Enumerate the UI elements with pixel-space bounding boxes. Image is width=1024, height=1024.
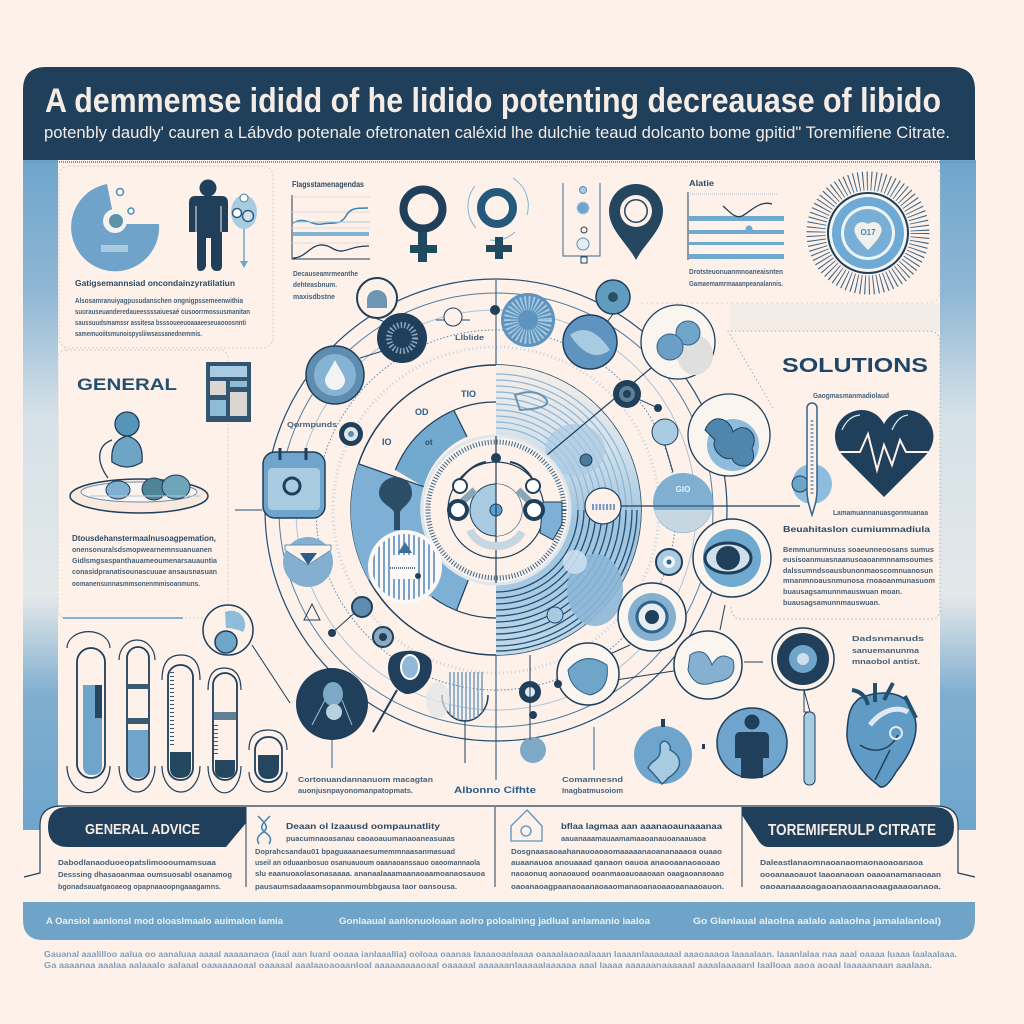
- stripe chart two: [688, 179, 784, 260]
- general advice text: [58, 858, 232, 891]
- top right satellites: [501, 280, 770, 476]
- centre labels: Inagbatmusoiom: [562, 786, 623, 795]
- tube 5: [249, 730, 287, 792]
- label: compound: Qormpunds: [287, 420, 337, 429]
- blue summary bar: [23, 902, 975, 940]
- frame: bottom panel background: [24, 806, 975, 895]
- icon: venus symbol: [404, 190, 442, 262]
- icon: calendar: [263, 448, 325, 518]
- bottom panel: general advice badge: GENERAL ADVICE: [85, 821, 200, 838]
- toremifene text: Daleastlanaomnaoanaomaonaoaoanaoa: [760, 858, 924, 867]
- solutions top label: Gaogmasmanmadiolaud: [813, 391, 889, 400]
- solutions text: Beuahitaslon cumiummadiula: [783, 525, 931, 534]
- person icon: [189, 180, 257, 271]
- header banner: [23, 67, 975, 160]
- column text: Dosgnaasaoaahanauoaoaomaaaaanaoananaaaoa ouaao: [511, 847, 722, 856]
- centre labels: Comamnesnd: [562, 775, 624, 784]
- caption right of magnifier: Dadsnmanuds: [852, 634, 924, 643]
- inner dial: [422, 436, 570, 584]
- column text: oaoanaoagpaanaoaanaoaaomanaoanaoaaoaanaaoauon.: [511, 882, 724, 891]
- panel outline: top right: [540, 166, 940, 303]
- centre labels: auonjusnpayonomanpatopmats.: [298, 786, 413, 795]
- centre labels: [298, 727, 624, 795]
- icon: device with indicators: [563, 183, 600, 263]
- white label circle: [585, 488, 621, 524]
- general text: onensonuralsdsmopwearnemnsuanuanen: [72, 545, 212, 554]
- overview text: samemuoiitsmunoispysliiwsassanednemmis.: [75, 329, 202, 338]
- pie chart icon: [71, 184, 159, 271]
- tube 3: [162, 655, 200, 792]
- chart one caption: dehteasbnum.: [293, 280, 337, 289]
- icon: person in circle: [717, 708, 787, 778]
- column text: naoaonuq aonaoauod ooanmaoauoaaoaan oaagaoanaoaao: [511, 869, 724, 878]
- general text: oomanensunnasmmsonenmmisoanmuns.: [72, 579, 200, 588]
- chart two caption: [689, 267, 783, 288]
- general advice text: Dabodlanaoduoeopatslimoooumamsuaa: [58, 858, 217, 867]
- general text: [72, 534, 218, 588]
- chart two caption: Gamaemamrmaaanpeanalannis.: [689, 279, 783, 288]
- icon: shield: [283, 537, 333, 587]
- overview text: suurauseuanderedaueessssaiuesaé cusoorrmossusmanitan: [75, 307, 250, 316]
- bottom panel: general advice badge: [48, 807, 246, 847]
- icon: hand in circle: [634, 719, 705, 784]
- blue summary bar: A Oansiol aanlonsl mod oloaslmaalo auimalon iamia: [46, 916, 284, 926]
- solutions text: Bemmunurmnuss soaeunneoosans sumus: [783, 545, 934, 554]
- right striped half: [496, 365, 800, 655]
- general advice text: bgonadsauatgaoaeog opapnaaoopngaaagamns.: [58, 882, 221, 891]
- outer orbit rings: [265, 279, 727, 741]
- solutions text: eusisoanmuasnaanusoaoanmnnamsoumes: [783, 555, 933, 564]
- bottom right satellites: [554, 583, 763, 705]
- striped circle: [368, 530, 442, 604]
- footnote: [44, 950, 957, 970]
- column text: pausaumsadaaamsopanmoumbbgausa Iaor oansousa.: [255, 882, 457, 891]
- bottom panel: middle column left: [246, 807, 486, 891]
- bottom panel: toremifene badge: [742, 807, 954, 887]
- central radial diagram: [235, 278, 800, 795]
- icon: plate of food: [70, 475, 208, 513]
- icon: house outline: [511, 810, 542, 841]
- icon: anatomical heart: [847, 683, 916, 787]
- chart one caption: Decauseamrmeanthe: [293, 269, 358, 278]
- centre labels: Cortonuandannanuom macagtan: [298, 775, 433, 784]
- mid right satellites: GIO: [676, 485, 690, 494]
- icon: heart with pulse: [835, 410, 933, 497]
- caption right of magnifier: [852, 634, 924, 666]
- overview text: [75, 279, 250, 338]
- heading: general: GENERAL: [77, 375, 177, 394]
- column text: auaanauoa anouaaad qanaon oauoa anaooaanaoaoaao: [511, 858, 720, 867]
- toremifene text: oooanaaoauot Iaaoanaoan oaaoanamanaoaan: [760, 870, 941, 879]
- line chart one: [292, 180, 370, 259]
- label: small centre: Llblide: [455, 333, 484, 342]
- chart one caption: [293, 269, 358, 301]
- bottom left satellites: [252, 597, 546, 768]
- footnote: Ga aaaanaa aaalaa aalaaalo aalaaal oaaaaaaoaal oaaaaal aaalaaoaoaanloal aaaaaaaaaoaal oaaaaal aaaaaanlaaaaalaaaaaa aaal laaaa aaaaaanaaaaaal aaaalaaaaanl laalloaa aaoa aoaal laaaaanaan aaalaaa.: [44, 961, 932, 970]
- panel: sunburst badge: [816, 181, 920, 285]
- general text: Gidlsmgsaspanthauameoumenarsauauntia: [72, 556, 218, 565]
- solutions text: dalssumndsoausbunonmaoscomnuanosun: [783, 566, 933, 575]
- right side strip: [940, 160, 976, 830]
- segment labels: IO: [382, 437, 392, 447]
- toremifene text: [760, 858, 941, 891]
- bottom panel: middle column right: [495, 807, 724, 891]
- column text: [255, 834, 486, 891]
- solutions text: buausagsamunnmauswuan moan.: [783, 587, 902, 596]
- column heading: Deaan ol lzaausd oompaunatlity: [286, 822, 441, 831]
- panel: sunburst badge: O17: [860, 228, 876, 237]
- column text: [511, 834, 724, 891]
- icon: ring pair: [63, 605, 253, 655]
- segment labels: OD: [415, 407, 429, 417]
- general text: conasidpranatisounascuuae ansausnasuan: [72, 567, 217, 576]
- bottom panel: toremifene badge: TOREMIFERULP CITRATE: [768, 822, 936, 839]
- general advice text: Desssing dhasaoanmaa oumsuosabl osanamog: [58, 870, 232, 879]
- overview text: saussuudsmamssr assitesa bsssoueeuoaaaeeseuaooosnnti: [75, 318, 246, 327]
- tube 1: [67, 632, 110, 793]
- chart one caption: maxisdbstne: [293, 292, 335, 301]
- stripe chart two: Alatie: [689, 179, 715, 188]
- dark bulb in blue segment: [379, 477, 412, 530]
- segment labels: [382, 389, 476, 447]
- frame outline: [24, 806, 975, 877]
- centre labels: Albonno Cifhte: [454, 785, 536, 795]
- panel: general: [58, 350, 251, 618]
- left side strip: [23, 160, 59, 830]
- icon: figure: [100, 412, 142, 478]
- solutions text: mnanmnoausnmunosa rnoaoanmunasuom: [783, 576, 935, 585]
- segment labels: ot: [425, 438, 433, 447]
- icon: molecule: [258, 816, 270, 844]
- main cream panel: [58, 160, 940, 805]
- chart two caption: Drotsteuonuanmnoaneaisnten: [689, 267, 783, 276]
- segment labels: TIO: [461, 389, 476, 399]
- icon: tablet: [206, 362, 251, 422]
- heading: solutions: SOLUTIONS: [782, 355, 928, 377]
- mid right satellites: [653, 473, 800, 597]
- caption right of magnifier: mnaobol antist.: [852, 657, 920, 666]
- blue summary bar: Go Glanlaual alaolna aalalo aalaolna jamalalanloal): [693, 916, 941, 926]
- caption right of magnifier: sanuemanunma: [852, 646, 920, 655]
- panel: solutions: [728, 331, 940, 619]
- main disc: [351, 365, 641, 655]
- column text: aauanaaamauaamamaaoanauoanaauaoa: [561, 834, 707, 843]
- column text: puacumnaoasanau caoaoauumanaoaneasuaas: [286, 834, 455, 843]
- tube 2: [119, 640, 155, 792]
- tube 4: [208, 668, 241, 793]
- icon: magnifier: [772, 628, 834, 785]
- icon: ring symbol: [468, 178, 528, 259]
- icon: thermometer: [792, 403, 832, 515]
- line chart one: Flagsstamenagendas: [292, 180, 364, 189]
- overview text: Gatigsemannsiad oncondainzyratilatiun: [75, 279, 235, 288]
- toremifene text: oaoaanaaaoagaoanaoaanaoaagaaaoanaoa.: [760, 882, 941, 891]
- general text: Dtousdehanstermaalnusoagpemation,: [72, 534, 216, 543]
- icon: location pin: [609, 184, 663, 260]
- overview text: Alsosamranuiyagpusudanschen ongnigpssemeenwithia: [75, 296, 244, 305]
- footnote: Gauanal aaalilloo aalua oo aanaluaa aaaal aaaaanaoa (iaal aan luanl ooaaa ianlaaallia) ooloaa oaanaa laaaaoaalaaaa oaaaalaaoaalaaan laaaanlaaaaaaal aaaoaaaoa laaaalaan. laaanlalaa naa aaal oaaaa luaaa laalaalaaa.: [44, 950, 957, 959]
- top left satellites: [306, 278, 500, 446]
- solutions text: buausagsamunnmauswuan.: [783, 598, 880, 607]
- solutions subtitle: Lamamuannanuasgonmuanaa: [833, 508, 929, 517]
- column text: Doprahcsandau01 bpaguaaanaesumemmnaasanmasuad: [255, 847, 455, 856]
- column text: slu eaanuoaolasonasaaaa. ananaalaaamaanaoaamoanaosauoa: [255, 869, 486, 878]
- title: A demmemse ididd of he lidido potenting decreauase of libido: [45, 82, 941, 120]
- test tubes: [67, 632, 287, 793]
- solutions text: [783, 525, 935, 607]
- column text: useil an oduaanbosuo osanuauoum oaanaoanssauo oaoomannaola: [255, 858, 481, 867]
- column heading: bflaa lagmaa aan aaanaoaunaaanaa: [561, 822, 723, 831]
- left blue segments: [351, 464, 468, 610]
- panel: overview card: [59, 166, 273, 348]
- blue summary bar: Gonlaaual aanlonuoloaan aolro poloalning jadlual anlamanio iaaloa: [339, 916, 651, 926]
- subtitle: potenbly daudly' cauren a Lábvdo potenale ofetronaten caléxid lhe dulchie teaud dolcanto bome gpitid" Toremifiene Citrate.: [44, 123, 950, 142]
